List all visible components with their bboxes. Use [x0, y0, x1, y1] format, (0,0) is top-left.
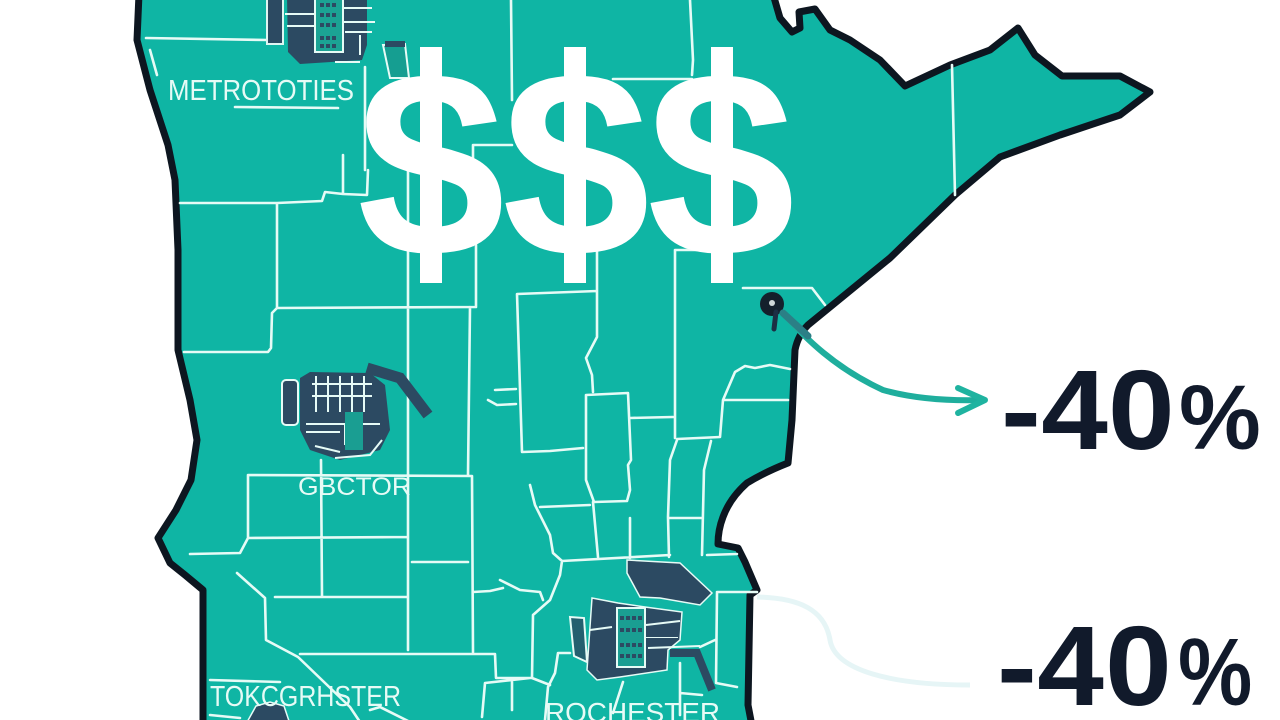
callout: first -40%: - [1001, 347, 1041, 473]
icon: dollar signs: $ [502, 16, 650, 313]
callout: first -40%: 4 [1041, 347, 1108, 473]
icon: engine, central [282, 368, 428, 460]
arrow: faint line to second callout [757, 597, 970, 685]
icon: location pin [760, 292, 784, 329]
callout: first -40%: % [1179, 367, 1261, 469]
arrow: to first callout [783, 313, 985, 413]
icon: engine, southeast [570, 560, 712, 690]
callout: second -40% [997, 603, 1252, 720]
label: southwest city: TOKCGRHSTER [210, 681, 401, 713]
icon: dollar signs: $ [647, 16, 795, 313]
map: Minnesota state shape [137, 0, 1150, 720]
icon: dollar signs [357, 16, 795, 313]
icon: engine, southwest [246, 702, 290, 720]
callout: first -40% [1001, 347, 1261, 473]
icon: engine, metro [267, 0, 409, 78]
callout: first -40%: 0 [1108, 347, 1175, 473]
label: metro cities: METROTOTIES [168, 75, 354, 107]
label: central city: GBCTOR [298, 473, 411, 501]
map: county boundary lines [146, 0, 955, 720]
icon: dollar signs: $ [357, 16, 505, 313]
